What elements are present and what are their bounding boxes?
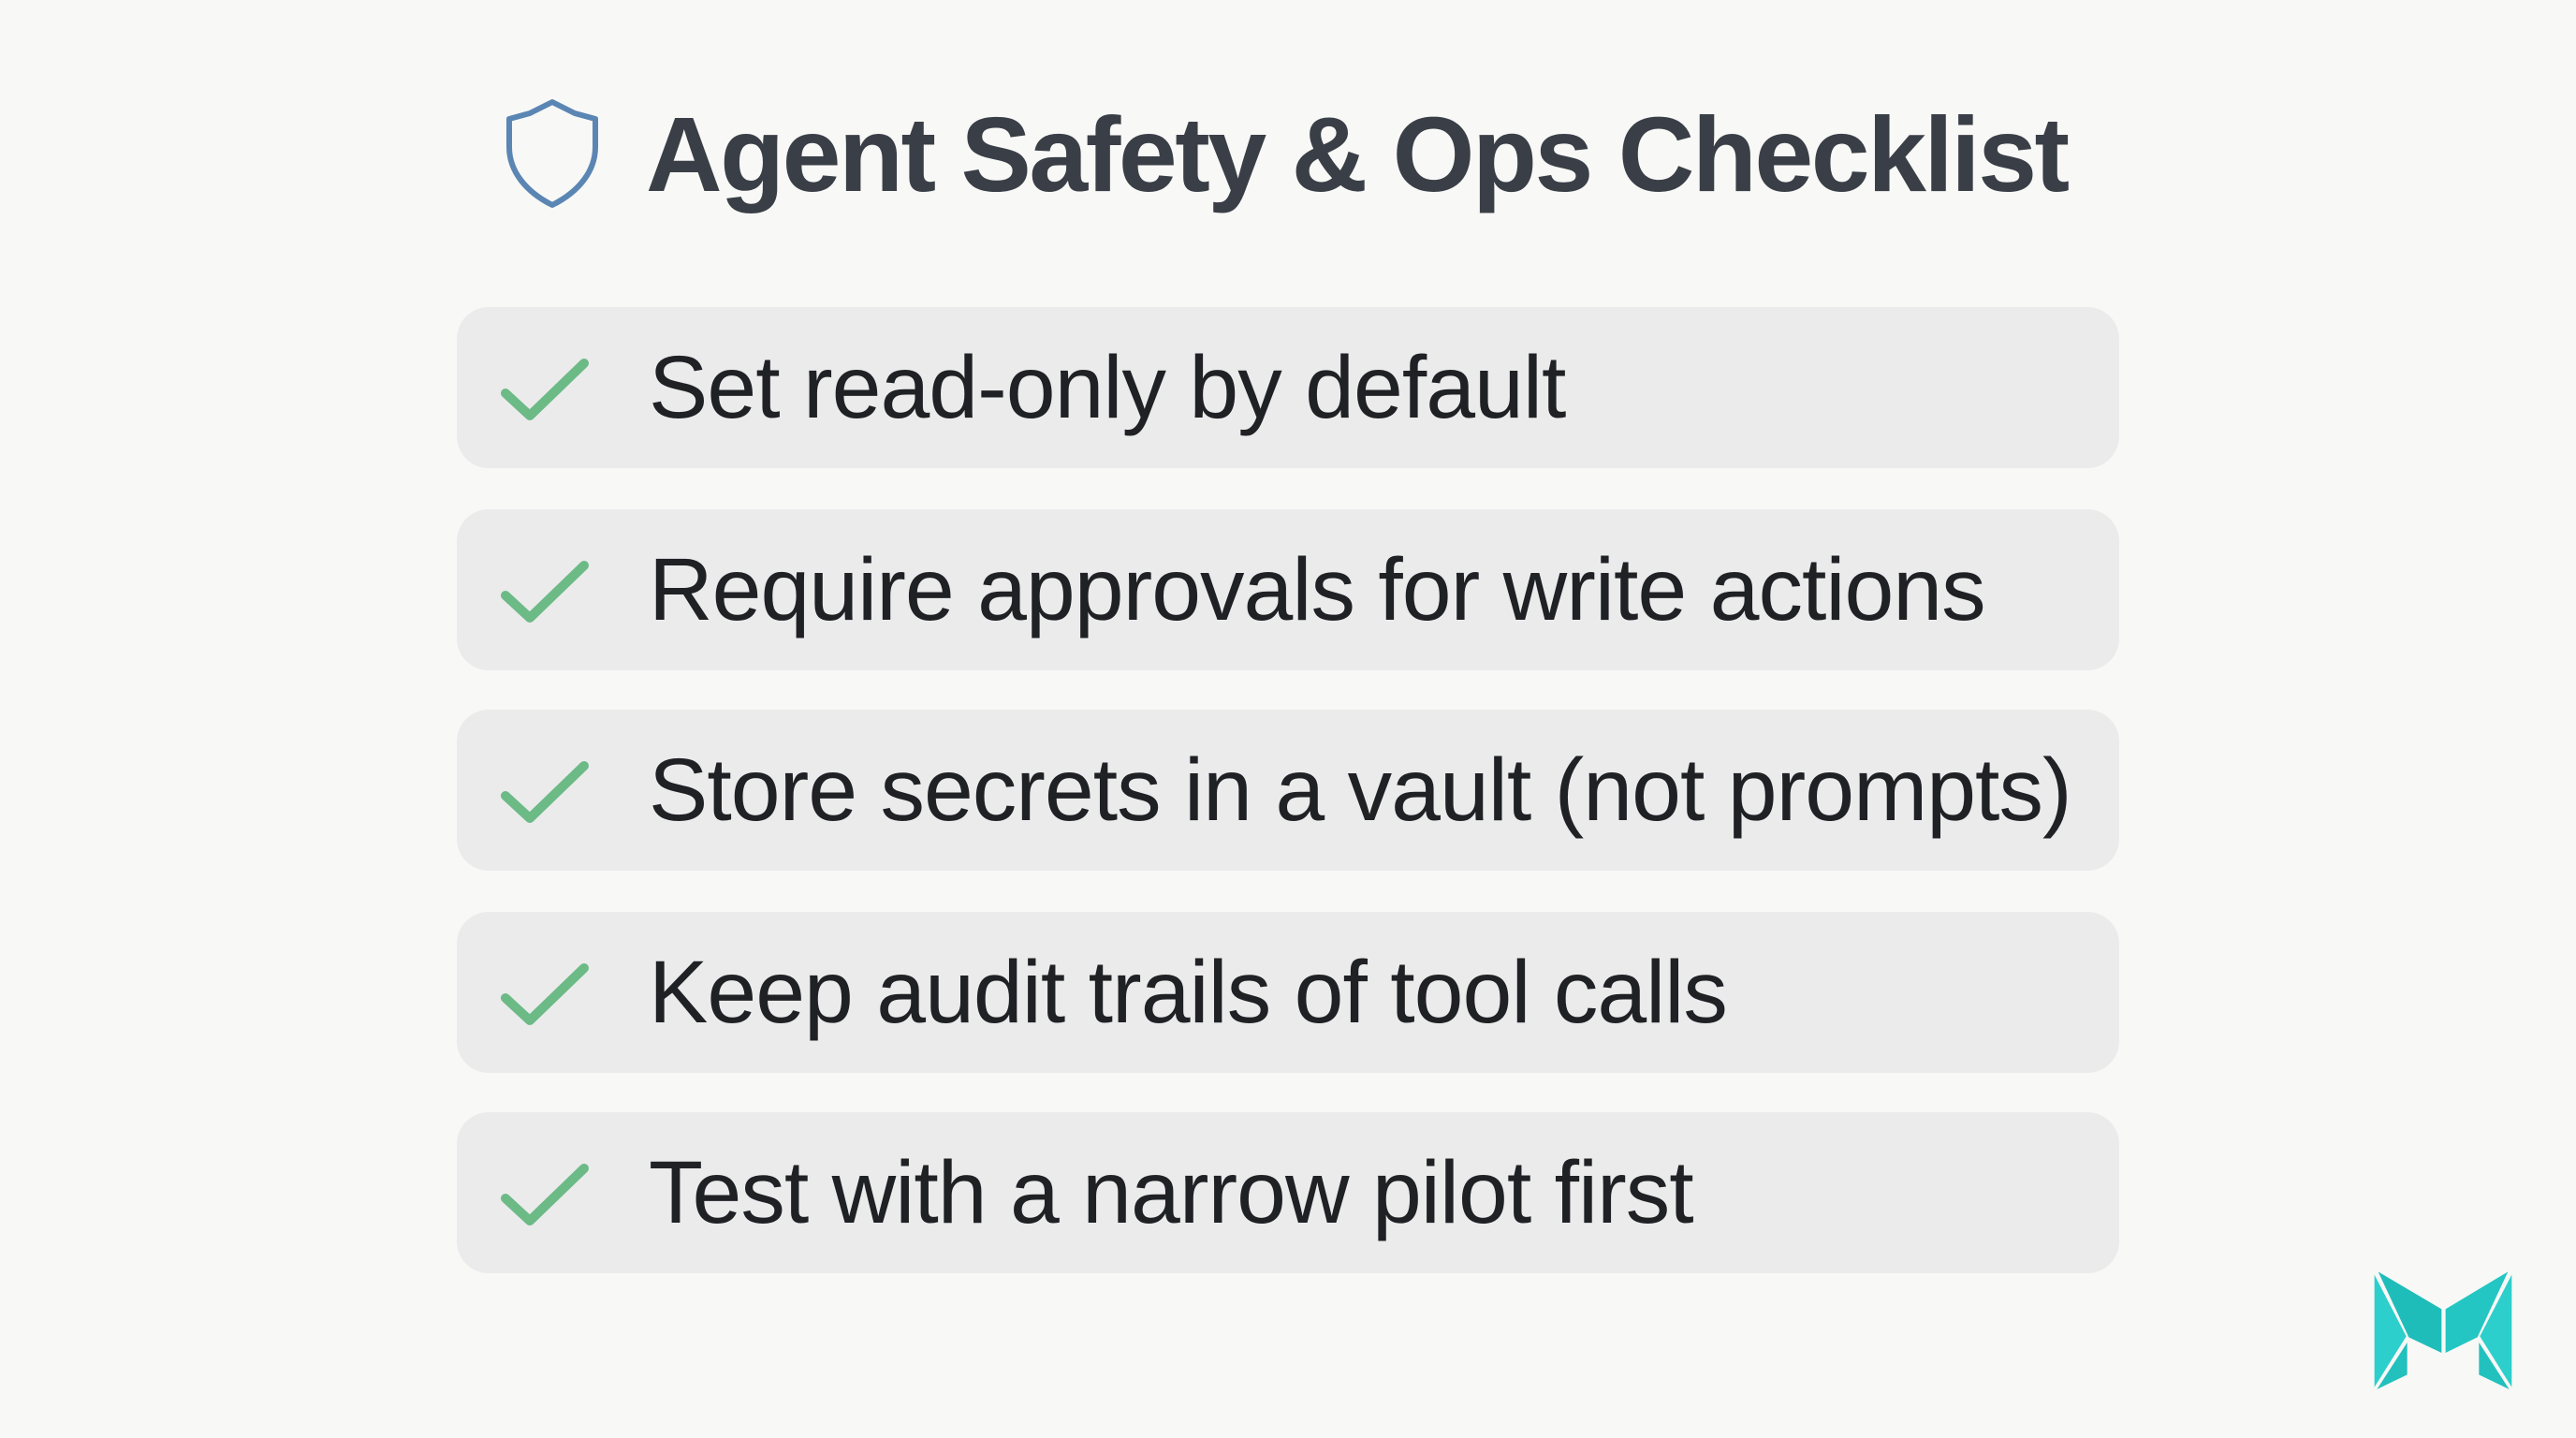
checklist item 3 [457, 710, 2119, 871]
icon: shield [506, 99, 598, 208]
heading: Agent Safety & Ops Checklist [646, 95, 2068, 213]
icon: check [501, 761, 589, 823]
icon: check [501, 963, 589, 1025]
item text: Store secrets in a vault (not prompts) [649, 741, 2071, 840]
item text: Require approvals for write actions [649, 540, 1985, 639]
icon: check [501, 1164, 589, 1225]
logo: M [2374, 1271, 2512, 1389]
checklist item 4 [457, 912, 2119, 1073]
title [506, 95, 2069, 213]
icon: check [501, 561, 589, 623]
checklist item 2 [457, 509, 2119, 670]
checklist item 1 [457, 307, 2119, 468]
item text: Test with a narrow pilot first [649, 1143, 1693, 1242]
checklist item 5 [457, 1112, 2119, 1273]
icon: check [501, 359, 589, 420]
item text: Keep audit trails of tool calls [649, 943, 1727, 1042]
item text: Set read-only by default [649, 338, 1565, 437]
